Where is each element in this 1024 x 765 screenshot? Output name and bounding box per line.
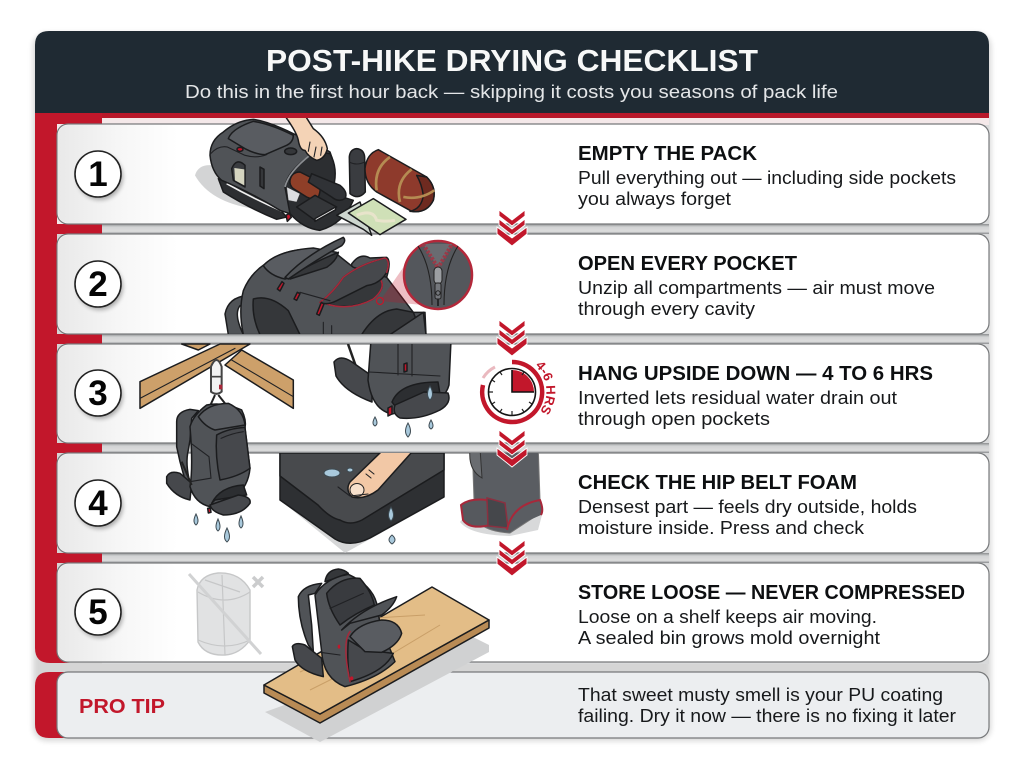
header band bbox=[35, 31, 989, 113]
illustration: open pockets with zip bbox=[225, 237, 426, 335]
text: step 1: you always forget bbox=[578, 189, 731, 209]
icon: crossed-out compressed bag bbox=[189, 573, 263, 655]
text: step 2: through every cavity bbox=[578, 299, 755, 319]
text: step 1: EMPTY THE PACK bbox=[578, 143, 758, 165]
pro tip text: That sweet musty smell is your PU coating bbox=[578, 685, 943, 705]
step number 2 bbox=[75, 261, 123, 310]
panel: step 1 card bbox=[57, 124, 989, 224]
panel: step 2 card bbox=[57, 234, 989, 334]
icon: water drops under hanging pack bbox=[194, 514, 243, 542]
illustration: inverted pack draining bbox=[334, 340, 451, 437]
pro tip text: failing. Dry it now — there is no fixing it later bbox=[578, 706, 956, 726]
text: step 1 bbox=[578, 143, 956, 209]
text: step 2: Unzip all compartments — air must move bbox=[578, 278, 935, 298]
icon: zipper magnifier bbox=[404, 241, 472, 309]
panel: step 5 card bbox=[57, 563, 989, 662]
title: POST-HIKE DRYING CHECKLIST bbox=[266, 43, 758, 78]
illustration: foam press bbox=[280, 452, 444, 553]
illustration: beam supports bbox=[140, 344, 293, 408]
step number 4: 4 bbox=[88, 484, 108, 523]
arrow: chevrons step 4 to 5 bbox=[497, 540, 527, 576]
callout wedge for zipper bbox=[376, 262, 423, 305]
illustration: hip belt close-up bbox=[460, 453, 544, 536]
text: step 1: Pull everything out — including side pockets bbox=[578, 168, 956, 188]
subtitle: Do this in the first hour back — skipping it costs you seasons of pack life bbox=[185, 82, 838, 102]
main board background bbox=[35, 113, 989, 664]
text: step 2 bbox=[578, 253, 935, 319]
text: step 3: through open pockets bbox=[578, 409, 770, 429]
text: step 4 bbox=[578, 472, 917, 538]
text: step 5: Loose on a shelf keeps air moving. bbox=[578, 607, 877, 627]
step number 5 bbox=[75, 589, 123, 638]
panel: step 3 card bbox=[57, 344, 989, 443]
step number 3: 3 bbox=[88, 374, 108, 413]
step number 3 bbox=[75, 370, 123, 419]
text: step 3 bbox=[578, 363, 933, 429]
illustration: emptying the pack bbox=[195, 115, 434, 235]
arrow: chevrons step 3 to 4 bbox=[497, 430, 527, 467]
text: step 4: Densest part — feels dry outside, holds bbox=[578, 497, 917, 517]
arrow: chevrons step 1 to 2 bbox=[497, 210, 527, 246]
pro tip label: PRO TIP bbox=[79, 696, 165, 718]
panel: pro tip bbox=[35, 672, 989, 738]
text: step 2: OPEN EVERY POCKET bbox=[578, 253, 797, 275]
step number 1 bbox=[75, 151, 123, 200]
pro tip text bbox=[578, 685, 956, 726]
text: step 5: STORE LOOSE — NEVER COMPRESSED bbox=[578, 582, 965, 604]
text: step 5: A sealed bin grows mold overnight bbox=[578, 628, 880, 648]
icon: clock 4-6 hrs bbox=[480, 360, 556, 424]
panel: step 4 card bbox=[57, 453, 989, 553]
step number 1: 1 bbox=[88, 155, 108, 194]
illustration: pack stored on shelf bbox=[292, 569, 402, 687]
step number 4 bbox=[75, 480, 123, 529]
text: step 5 bbox=[578, 582, 965, 648]
illustration: wooden shelf bbox=[264, 587, 489, 742]
illustration: hanging pack bbox=[167, 360, 250, 515]
text: step 3: HANG UPSIDE DOWN — 4 TO 6 HRS bbox=[578, 363, 933, 385]
text: step 3: Inverted lets residual water drain out bbox=[578, 388, 897, 408]
step number 5: 5 bbox=[88, 593, 108, 632]
icon: clock 4-6 hrs: 4-6 HRS bbox=[536, 362, 556, 414]
arrow: chevrons step 2 to 3 bbox=[497, 320, 527, 356]
text: step 4: CHECK THE HIP BELT FOAM bbox=[578, 472, 857, 494]
text: step 4: moisture inside. Press and check bbox=[578, 518, 865, 538]
step number 2: 2 bbox=[88, 265, 108, 304]
